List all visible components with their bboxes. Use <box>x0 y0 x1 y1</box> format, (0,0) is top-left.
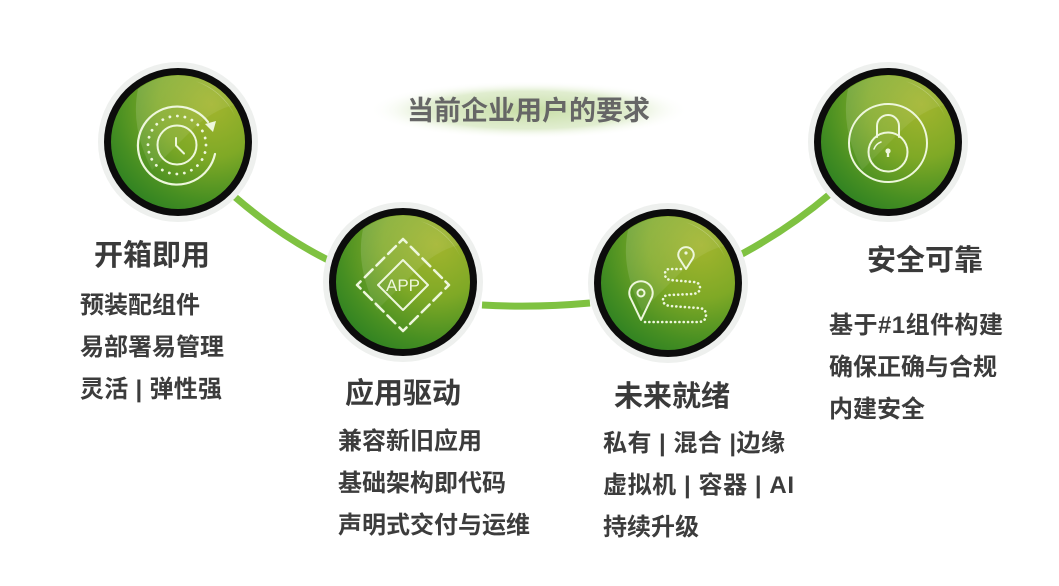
feature list: 持续升级 <box>603 514 699 541</box>
title glow <box>369 81 689 139</box>
panel: out of the box <box>80 62 258 403</box>
feature list <box>829 312 1003 423</box>
feature list <box>338 428 530 539</box>
icon: route badge <box>588 203 748 363</box>
icon: padlock badge <box>808 62 968 222</box>
heading: 安全可靠 <box>867 244 983 277</box>
feature list: 预装配组件 <box>80 292 200 319</box>
feature list <box>603 430 794 541</box>
feature list: 基础架构即代码 <box>338 470 506 497</box>
heading: 应用驱动 <box>345 377 461 410</box>
heading: 未来就绪 <box>614 380 730 413</box>
title <box>369 81 689 139</box>
heading: 开箱即用 <box>94 239 210 272</box>
panel: secure and reliable <box>808 62 1003 423</box>
connector: step 2 to 3 <box>482 303 590 306</box>
panel: future ready <box>588 203 794 541</box>
feature list: 声明式交付与运维 <box>338 511 530 539</box>
feature list: 确保正确与合规 <box>829 354 997 381</box>
panel: application driven <box>323 202 530 539</box>
icon: clock badge <box>98 62 258 222</box>
title text: 当前企业用户的要求 <box>407 96 650 126</box>
feature list: 灵活 | 弹性强 <box>80 376 222 403</box>
feature list: 私有 | 混合 |边缘 <box>603 430 785 457</box>
feature list: 基于#1组件构建 <box>829 312 1003 339</box>
connector: step 3 to 4 <box>742 194 830 254</box>
icon: app badge: APP <box>386 276 420 295</box>
feature list <box>80 292 224 403</box>
icon: app badge <box>323 202 483 362</box>
feature list: 虚拟机 | 容器 | AI <box>603 472 794 499</box>
connector: step 1 to 2 <box>235 197 328 260</box>
feature list: 易部署易管理 <box>80 334 224 361</box>
feature list: 兼容新旧应用 <box>338 428 482 455</box>
feature list: 内建安全 <box>829 396 925 423</box>
